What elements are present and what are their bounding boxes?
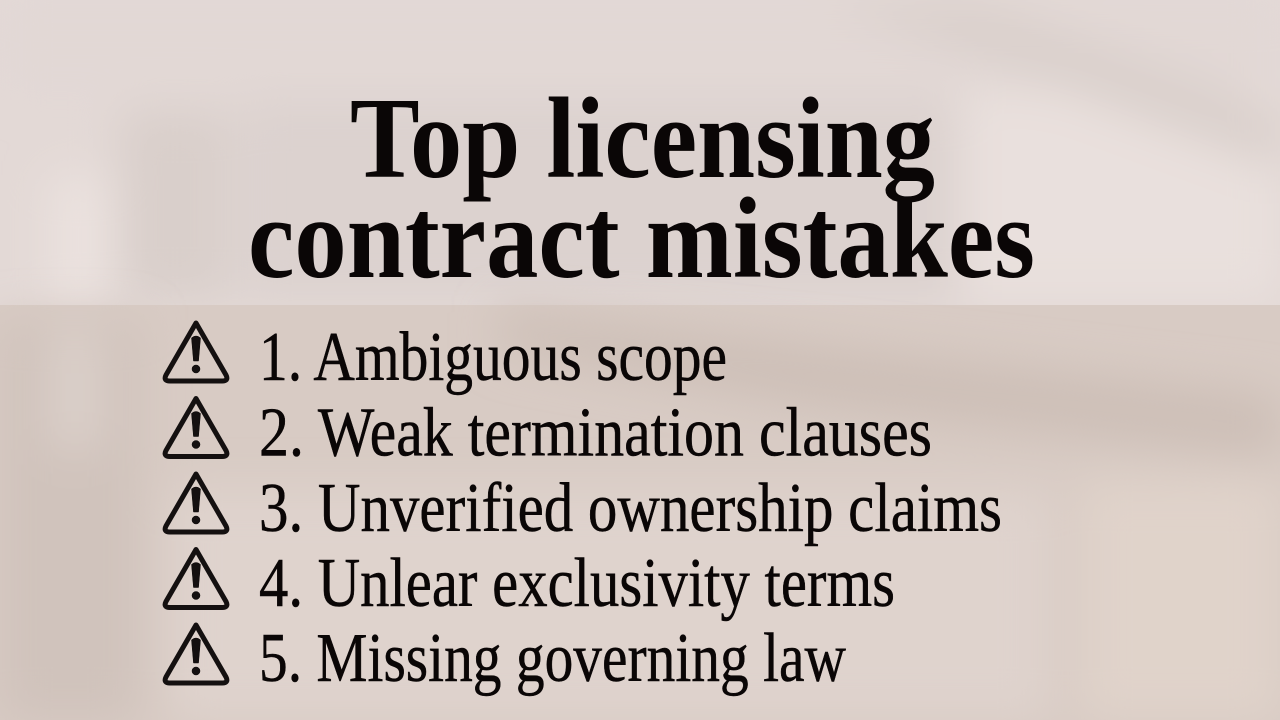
lower band <box>0 305 1280 720</box>
item 2: weak termination clauses: 2. Weak termination clauses <box>259 394 932 472</box>
item 1: ambiguous scope: 1. Ambiguous scope <box>259 319 727 396</box>
title: Top licensing <box>350 75 935 203</box>
title: contract mistakes <box>248 175 1035 303</box>
item 4: unclear exclusivity terms: 4. Unlear exclusivity terms <box>259 545 895 622</box>
list of licensing mistakes <box>165 319 1002 697</box>
title <box>248 75 1035 303</box>
item 5: missing governing law: 5. Missing governing law <box>259 620 846 697</box>
item 3: unverified ownership claims: 3. Unverified ownership claims <box>259 470 1002 547</box>
